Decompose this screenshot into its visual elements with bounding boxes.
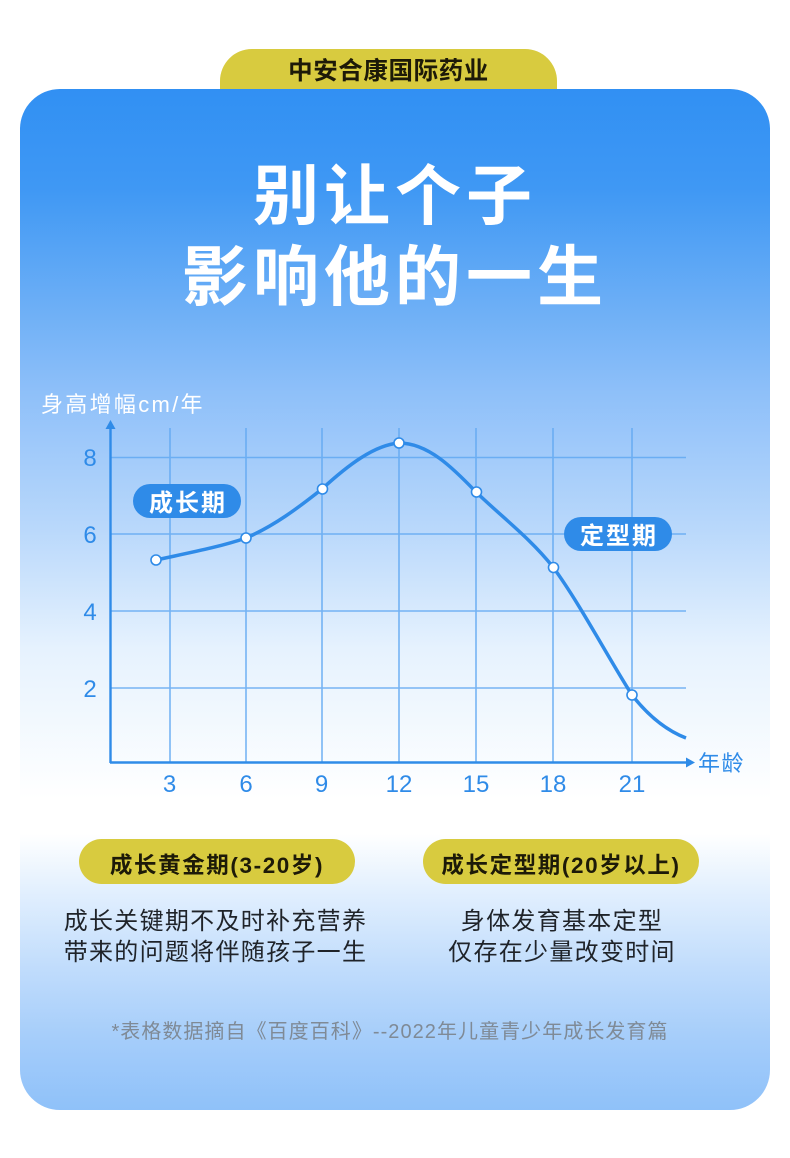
title line 1: 别让个子 xyxy=(253,159,537,233)
text: settled period description xyxy=(448,908,676,966)
x axis title: 年龄 xyxy=(698,751,745,776)
badge: settled period: 定型期 xyxy=(580,523,658,550)
y axis labels: 4 xyxy=(83,599,97,626)
x axis labels: 12 xyxy=(386,771,412,798)
pill: settled growth period: 成长定型期(20岁以上) xyxy=(441,853,681,878)
y axis labels: 6 xyxy=(83,522,97,549)
x axis labels: 3 xyxy=(163,771,176,798)
y axis labels xyxy=(83,445,97,703)
text: golden period description: 成长关键期不及时补充营养 xyxy=(64,908,367,934)
x axis labels: 15 xyxy=(463,771,489,798)
badge: growth period: 成长期 xyxy=(149,490,227,517)
y axis xyxy=(106,420,116,763)
growth chart xyxy=(41,392,745,798)
x axis xyxy=(110,758,695,768)
badge: growth period xyxy=(133,484,241,518)
y axis labels: 8 xyxy=(83,445,97,472)
pill: settled growth period xyxy=(423,839,699,884)
badge: settled period xyxy=(564,517,672,551)
growth curve xyxy=(156,443,686,738)
brand tab xyxy=(220,49,557,89)
x axis labels: 21 xyxy=(619,771,645,798)
x axis labels: 6 xyxy=(239,771,253,798)
y axis title: 身高增幅cm/年 xyxy=(41,392,205,417)
x axis labels: 18 xyxy=(540,771,566,798)
data points xyxy=(151,438,637,700)
pill: golden growth period xyxy=(79,839,355,884)
text: golden period description xyxy=(64,908,367,966)
brand name: 中安合康国际药业 xyxy=(288,58,489,85)
text: settled period description: 仅存在少量改变时间 xyxy=(448,939,676,966)
pill: golden growth period: 成长黄金期(3-20岁) xyxy=(110,853,324,878)
y axis labels: 2 xyxy=(83,676,97,703)
x axis labels: 9 xyxy=(315,771,328,798)
text: golden period description: 带来的问题将伴随孩子一生 xyxy=(64,939,367,966)
source note: *表格数据摘自《百度百科》--2022年儿童青少年成长发育篇 xyxy=(111,1021,669,1043)
title line 2: 影响他的一生 xyxy=(182,240,608,314)
text: settled period description: 身体发育基本定型 xyxy=(461,908,663,934)
x axis labels xyxy=(163,771,645,798)
